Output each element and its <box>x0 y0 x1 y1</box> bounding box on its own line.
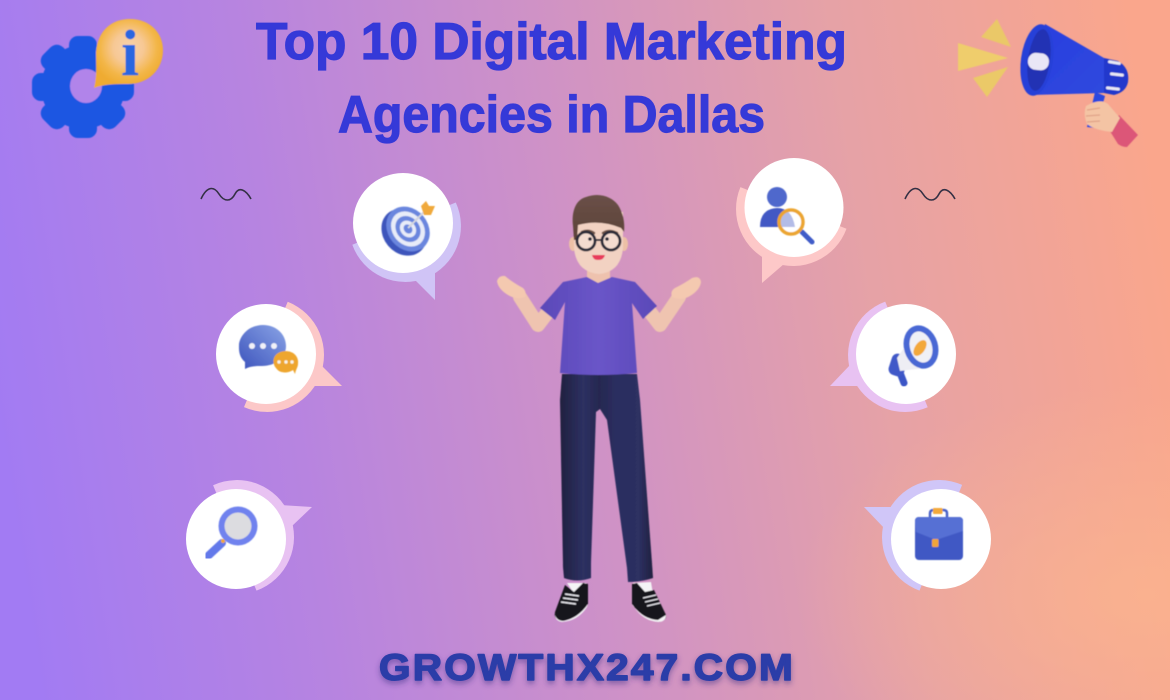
icon: chat bubbles <box>239 325 298 374</box>
title <box>256 13 847 144</box>
bubble: megaphone <box>830 302 956 412</box>
icon: gear with info bubble <box>32 17 163 138</box>
icon: gear with info bubble: i <box>121 17 139 90</box>
footer website text: GROWTHX247.COM <box>379 647 795 688</box>
man: arms and hands <box>497 276 701 325</box>
man: shoes <box>555 582 666 622</box>
icon: user with magnifier <box>760 187 812 242</box>
man: t-shirt <box>540 277 657 375</box>
man: trousers <box>560 374 653 582</box>
icon: target dart <box>408 201 435 228</box>
title: Top 10 Digital Marketing <box>256 13 847 71</box>
bubble: user search <box>736 158 846 283</box>
icon: target <box>372 197 439 265</box>
bubble: briefcase <box>864 480 991 591</box>
icon: megaphone with hand and yellow shards <box>958 19 1138 147</box>
illustration: man shrugging <box>497 195 701 622</box>
man: head <box>569 195 628 274</box>
icon: magnifying glass <box>208 506 258 556</box>
man: neck <box>587 266 610 284</box>
icon: megaphone <box>887 321 944 383</box>
icon: briefcase <box>915 508 963 560</box>
bubble: chat <box>216 302 342 412</box>
bubble: target <box>352 173 461 300</box>
footer website text: GROWTHX247.COM <box>379 650 795 691</box>
title: Agencies in Dallas <box>338 86 765 144</box>
decorative squiggle left <box>201 189 251 200</box>
bubble: magnifier <box>186 480 312 591</box>
decorative squiggle right <box>905 189 955 200</box>
